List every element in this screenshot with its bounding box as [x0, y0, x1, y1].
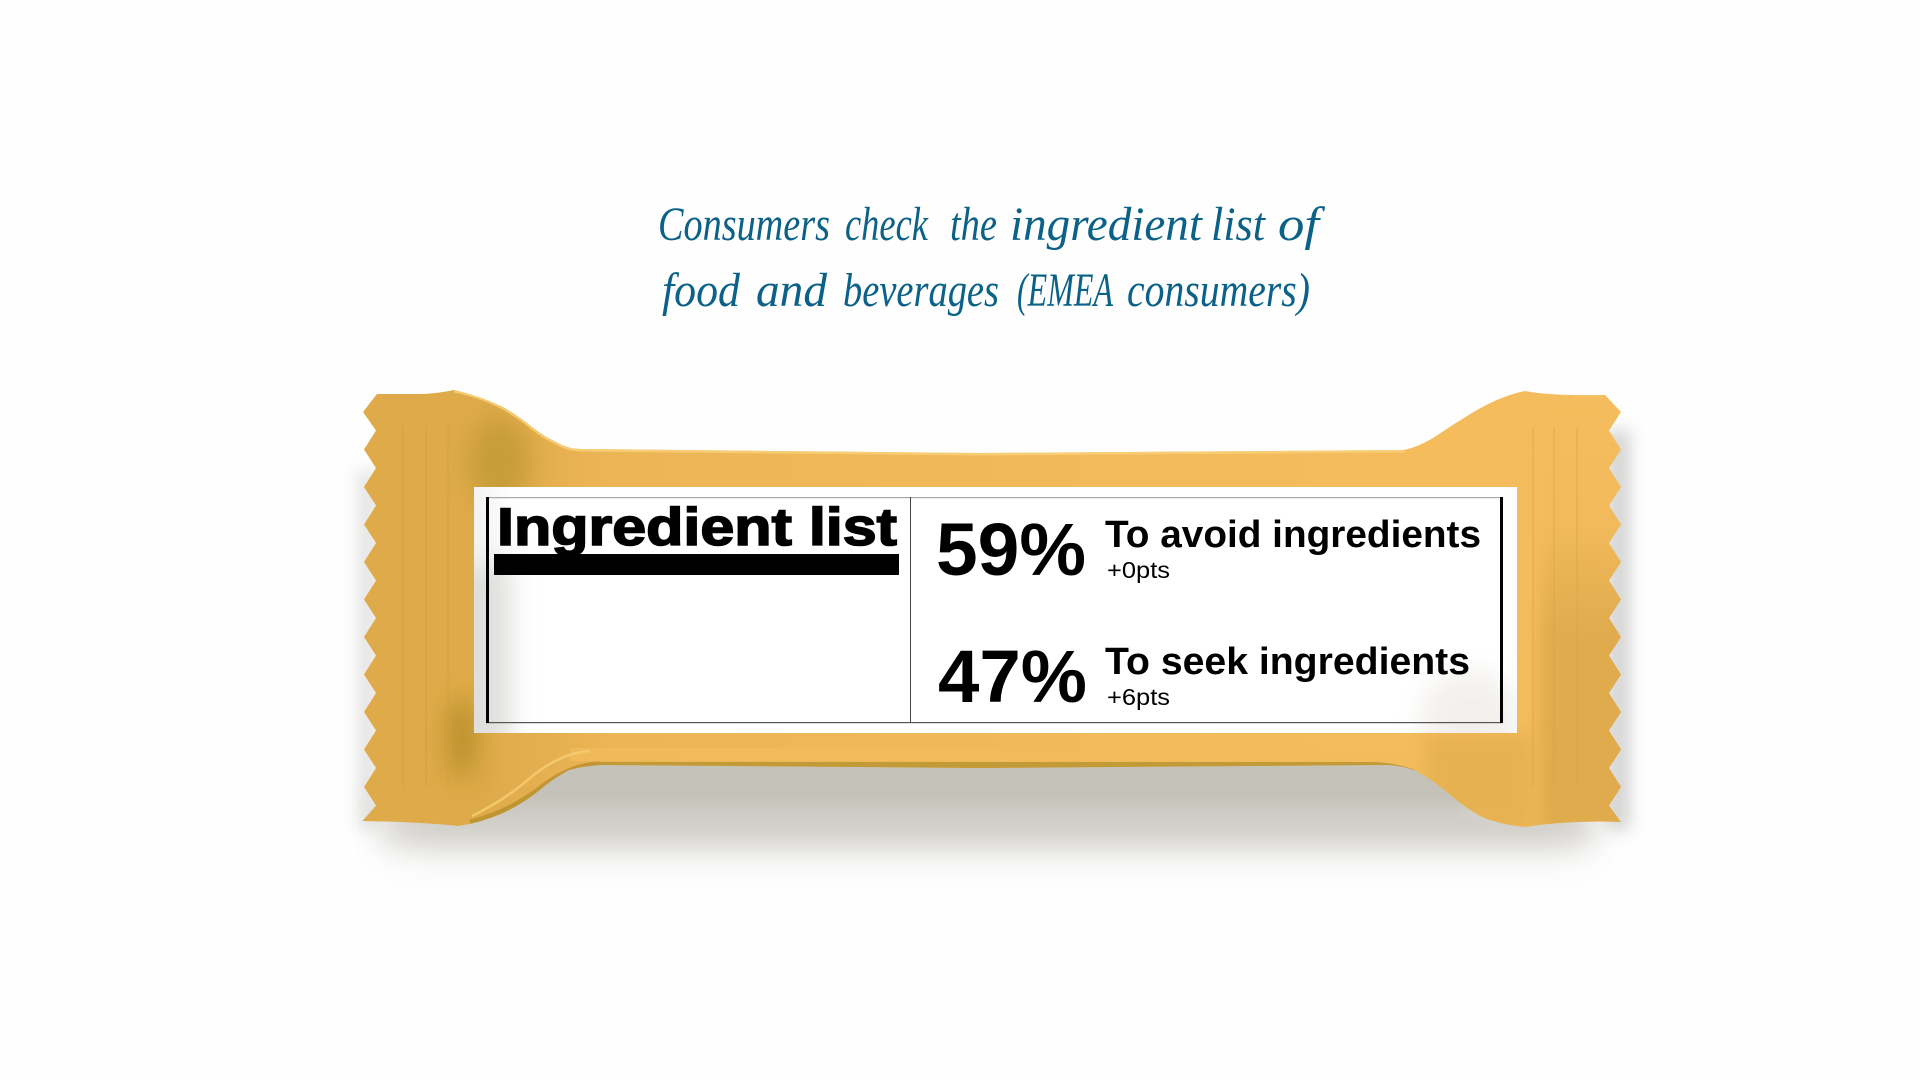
- title: Consumers: [658, 199, 830, 251]
- right end lower shade: [1537, 532, 1621, 826]
- top edge highlight: [454, 391, 1404, 454]
- title: consumers): [1127, 265, 1310, 317]
- drop shadow of the bar: [358, 430, 1630, 845]
- title: check: [845, 199, 929, 251]
- left lower fold highlight: [472, 751, 590, 816]
- heading: Ingredient list: Ingredient list: [497, 498, 897, 557]
- snack bar wrapper: [360, 385, 1640, 835]
- title: list: [1211, 199, 1266, 251]
- fold shading left bottom: [448, 696, 476, 780]
- stat: 47% to seek ingredients: To seek ingredients: [1105, 641, 1470, 683]
- label shading: [474, 487, 1517, 733]
- stat: 47% to seek ingredients: 47%: [938, 635, 1087, 718]
- title: of: [1278, 199, 1325, 251]
- title: and: [756, 265, 828, 317]
- stat: 59% to avoid ingredients: [936, 508, 1481, 591]
- stat: 59% to avoid ingredients: 59%: [936, 508, 1086, 591]
- crimp ribs left: [403, 425, 448, 787]
- title: (EMEA: [1017, 265, 1114, 317]
- stat: 47% to seek ingredients: +6pts: [1107, 684, 1170, 710]
- fold shading left top: [470, 416, 530, 508]
- ingredient label: [474, 487, 1517, 733]
- title: the: [950, 199, 997, 251]
- label table frame: [486, 497, 1503, 723]
- stat: 59% to avoid ingredients: To avoid ingredients: [1105, 514, 1481, 556]
- crimp ribs right: [1533, 428, 1577, 787]
- title: [658, 199, 1325, 317]
- stat: 47% to seek ingredients: [938, 635, 1470, 718]
- heading rule: [494, 554, 899, 575]
- lower band highlight: [570, 748, 1420, 761]
- title: food: [662, 265, 741, 317]
- lower edge shade: [600, 762, 1415, 770]
- title: ingredient: [1010, 199, 1203, 251]
- title: beverages: [843, 265, 999, 317]
- stat: 59% to avoid ingredients: +0pts: [1107, 557, 1170, 583]
